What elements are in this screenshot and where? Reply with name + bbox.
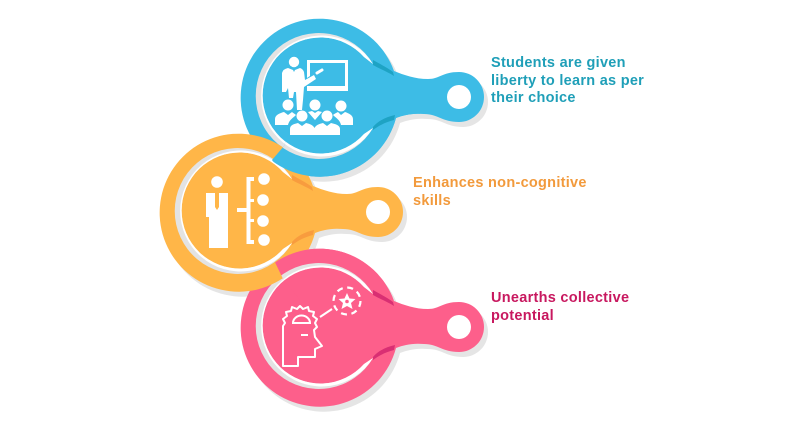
text: blue caption xyxy=(491,55,644,106)
text: pink caption: Unearths collective xyxy=(491,290,629,306)
text: pink caption: potential xyxy=(491,308,554,324)
icon: person with tree of nodes xyxy=(206,173,270,248)
icon: teacher at board with students xyxy=(275,57,353,135)
text: pink caption xyxy=(491,290,629,324)
text: blue caption: liberty to learn as per xyxy=(491,72,644,88)
text: blue caption: their choice xyxy=(491,90,576,106)
panel: pink key overlap and details xyxy=(275,248,471,360)
text: yellow caption xyxy=(413,175,587,208)
text: blue caption: Students are given xyxy=(491,55,626,71)
panel: blue key base xyxy=(241,19,484,177)
text: yellow caption: skills xyxy=(413,192,451,208)
panel: blue key overlap and details xyxy=(272,60,471,177)
drop shadows xyxy=(164,24,488,412)
panel: yellow key xyxy=(160,134,403,292)
icon: head with gear and star idea xyxy=(283,288,360,366)
text: yellow caption: Enhances non-cognitive xyxy=(413,175,587,191)
panel: pink key base xyxy=(241,249,484,407)
